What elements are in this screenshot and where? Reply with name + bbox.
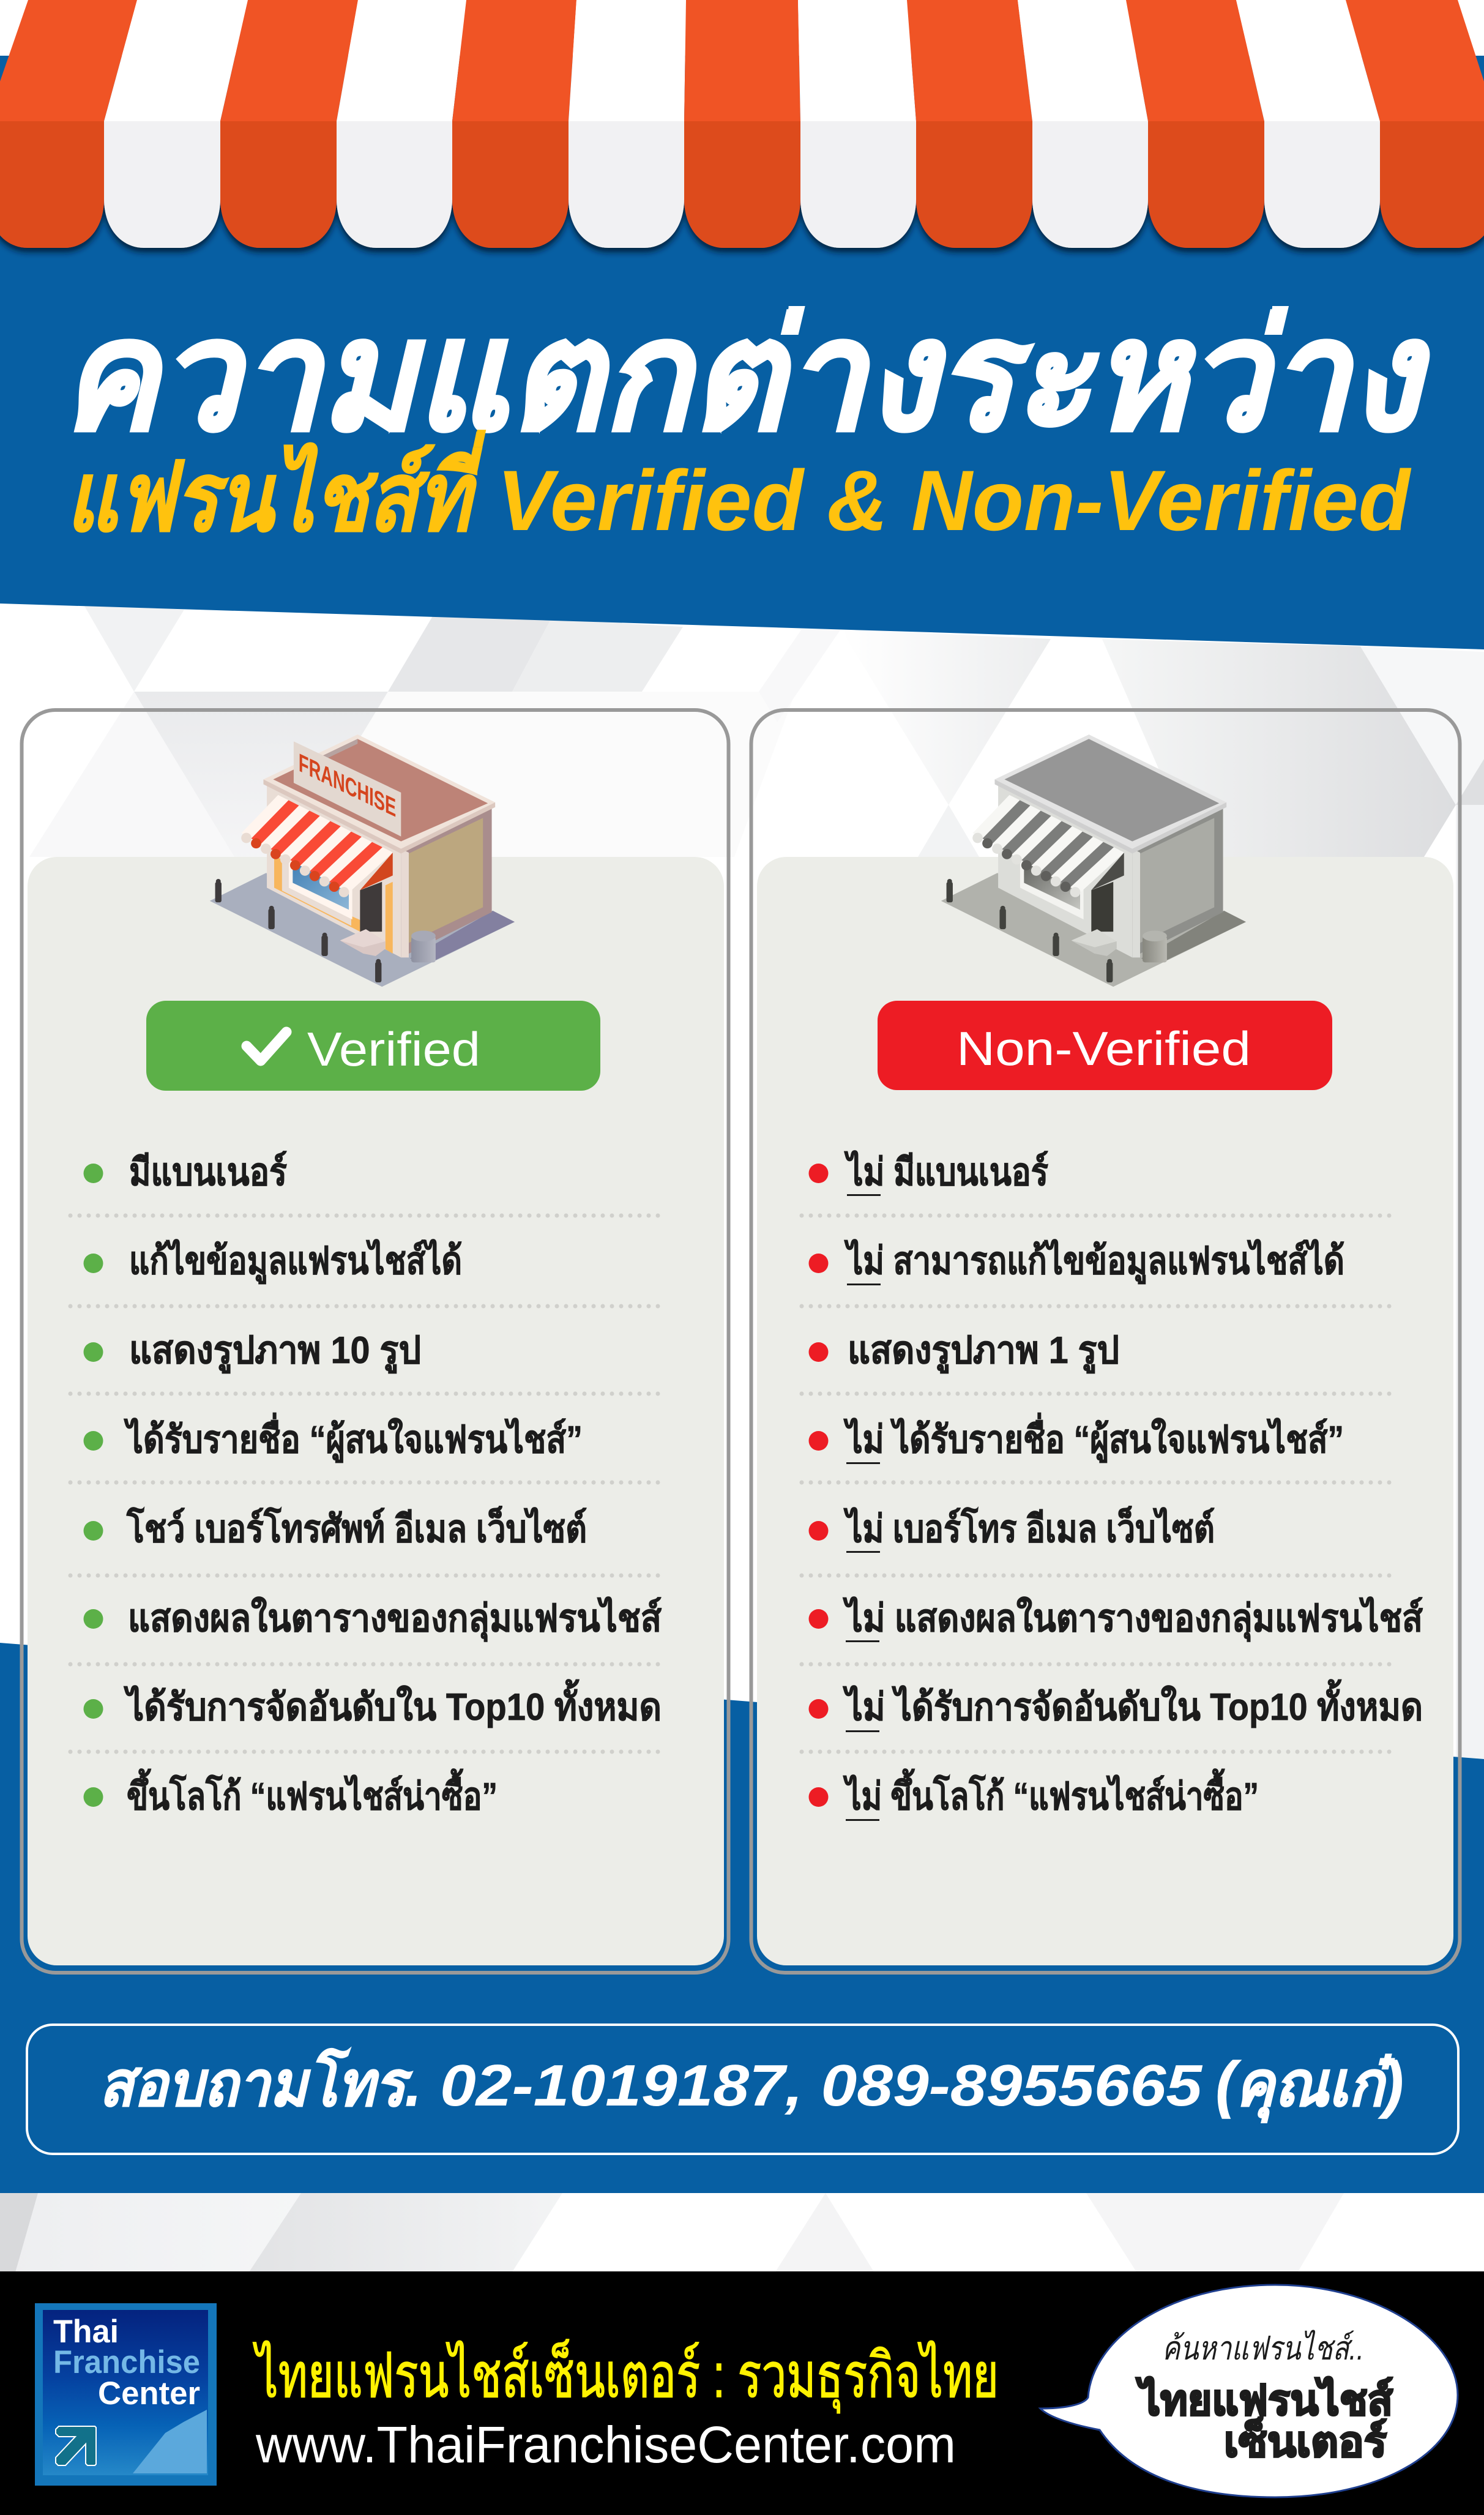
item 5: โชว์ เบอร์โทรศัพท์ อีเมล เว็บไซต์ [126, 1506, 587, 1550]
item 8: ไม่ ขึ้นโลโก้ “แฟรนไชส์น่าซื้อ” [843, 1768, 1259, 1818]
item 7: ไม่ ได้รับการจัดอันดับใน Top10 ทั้งหมด [843, 1679, 1423, 1728]
logo word: Center: Center [98, 2375, 200, 2412]
non-verified badge [878, 1001, 1332, 1090]
subtitle Thai part: แฟรนไชส์ที่ [66, 430, 485, 551]
awning [0, 0, 1484, 248]
badge label: Verified [307, 1022, 480, 1076]
item 3: แสดงรูปภาพ 1 รูป [848, 1329, 1119, 1373]
panel: non-verified [751, 710, 1460, 1973]
item 6: แสดงผลในตารางของกลุ่มแฟรนไชส์ [128, 1596, 662, 1642]
item 3: แสดงรูปภาพ 10 รูป [129, 1329, 421, 1373]
item 2: แก้ไขข้อมูลแฟรนไชส์ได้ [129, 1239, 462, 1284]
verified badge [146, 1001, 600, 1091]
item 1: ไม่ มีแบนเนอร์ [844, 1150, 1048, 1194]
item 4: ได้รับรายชื่อ “ผู้สนใจแฟรนไชส์” [124, 1413, 583, 1463]
contact label: สอบถามโทร. [99, 2047, 421, 2119]
bubble bold line 1: ไทยแฟรนไชส์ [1136, 2376, 1393, 2424]
footer website: www.ThaiFranchiseCenter.com [255, 2416, 956, 2473]
blue lower band [0, 1643, 1484, 2193]
logo: Thai Franchise Center [35, 2303, 217, 2486]
contact box [27, 2025, 1458, 2154]
bubble bold line 2: เซ็นเตอร์ [1224, 2417, 1387, 2465]
logo word: Franchise: Franchise [53, 2344, 200, 2380]
item 8: ขึ้นโลโก้ “แฟรนไชส์น่าซื้อ” [127, 1768, 498, 1818]
contact name: (คุณเก๋) [1216, 2049, 1403, 2123]
contact numbers: 02-1019187, 089-8955665 [440, 2053, 1203, 2118]
subtitle [66, 430, 1411, 551]
footer tagline: ไทยแฟรนไชส์เซ็นเตอร์ : รวมธุรกิจไทย [253, 2339, 999, 2413]
item 1: มีแบนเนอร์ [129, 1151, 287, 1194]
item 2: ไม่ สามารถแก้ไขข้อมูลแฟรนไชส์ได้ [844, 1239, 1344, 1284]
speech bubble [1040, 2285, 1458, 2497]
logo word: Thai: Thai [53, 2314, 119, 2350]
verified checklist [70, 1151, 662, 1818]
icon: logo arrow [56, 2426, 96, 2465]
blue header band [0, 56, 1484, 649]
item 7: ได้รับการจัดอันดับใน Top10 ทั้งหมด [124, 1679, 662, 1728]
item 6: ไม่ แสดงผลในตารางของกลุ่มแฟรนไชส์ [843, 1596, 1423, 1642]
icon: check mark [247, 1032, 286, 1061]
icon: colour franchise shop [210, 734, 515, 987]
sign text: FRANCHISE: FRANCHISE [299, 748, 396, 823]
icon: grey shop [941, 734, 1246, 987]
item 4: ไม่ ได้รับรายชื่อ “ผู้สนใจแฟรนไชส์” [843, 1413, 1344, 1463]
badge label: Non-Verified [956, 1022, 1251, 1075]
footer black bar [0, 2271, 1484, 2515]
panel: verified [22, 710, 728, 1973]
subtitle Latin part: Verified & Non-Verified [497, 452, 1411, 548]
title: ความแตกต่างระหว่าง [61, 290, 1431, 461]
non-verified checklist [802, 1150, 1423, 1821]
background triangle pattern [0, 603, 1484, 2375]
bubble small text: ค้นหาแฟรนไชส์.. [1162, 2330, 1364, 2367]
item 5: ไม่ เบอร์โทร อีเมล เว็บไซต์ [843, 1506, 1215, 1550]
